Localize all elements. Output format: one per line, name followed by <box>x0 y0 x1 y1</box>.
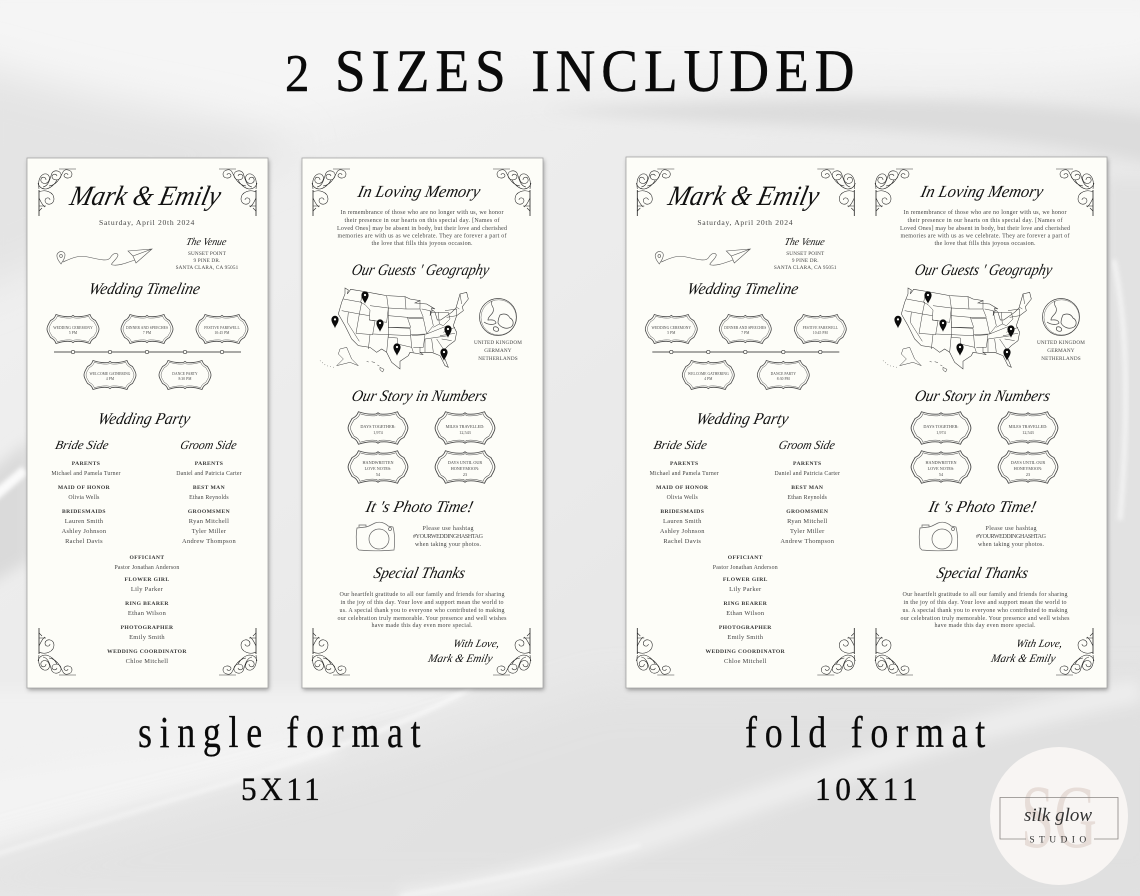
caption: single format: single format <box>138 708 421 757</box>
memorial paragraph: the love that fills this joyous occasion. <box>372 240 473 247</box>
corner ornament top right <box>1056 169 1094 216</box>
memorial paragraph: the love that fills this joyous occasion. <box>934 240 1036 247</box>
plaque: days together: 1,974 <box>373 430 384 436</box>
plaque: handwritten love notes <box>348 451 408 483</box>
sign-off: Mark & Emily <box>426 652 495 665</box>
plaque: days until honeymoon: DAYS UNTIL OUR <box>1011 460 1045 465</box>
other roles list: Ethan Wilson <box>726 610 765 617</box>
chart: US guest map with pins <box>883 288 1031 372</box>
plaque: dinner and speeches <box>121 314 173 344</box>
plaque: welcome gathering: WELCOME GATHERING <box>688 372 729 376</box>
bride side list: Bride Side <box>652 438 709 452</box>
thanks paragraph: Our heartfelt gratitude to all our family and friends for sharing <box>902 591 1068 598</box>
thanks paragraph: have made this day even more special. <box>934 623 1036 629</box>
plaque: miles travelled: MILES TRAVELLED: <box>1009 424 1047 429</box>
memorial paragraph: In remembrance of those who are no longer with us, we honor <box>904 209 1066 216</box>
icon: paper plane route <box>655 249 750 265</box>
plaque: days until honeymoon: DAYS UNTIL OUR <box>448 460 482 465</box>
plaque: wedding ceremony <box>47 314 99 344</box>
panel: single format front <box>27 158 269 690</box>
heading: special thanks: Special Thanks <box>935 564 1030 582</box>
thanks paragraph: our celebration truly memorable. Your presence and well wishes <box>338 616 507 622</box>
corner ornament top right <box>219 169 257 216</box>
plaque: festive farewell <box>196 314 248 344</box>
corner ornament bottom left <box>875 628 913 675</box>
other roles list: PHOTOGRAPHER <box>719 625 772 631</box>
plaque: handwritten love notes: HANDWRITTEN <box>926 460 956 465</box>
groom side list: Groom Side <box>179 438 239 452</box>
groom side list: Tyler Miller <box>192 528 227 535</box>
bride side list: BRIDESMAIDS <box>62 509 106 515</box>
plaque: dinner and speeches: 7 PM <box>741 331 750 335</box>
bride side list: Olivia Wells <box>667 495 698 501</box>
plaque: days together <box>348 412 408 444</box>
groom side list: GROOMSMEN <box>786 509 828 515</box>
venue block: SANTA CLARA, CA 95051 <box>774 265 837 271</box>
venue block: The Venue <box>783 237 826 248</box>
hashtag note: #YOURWEDDINGHASHTAG <box>976 534 1047 540</box>
other roles list: RING BEARER <box>125 601 169 607</box>
international guests: GERMANY <box>1047 348 1075 354</box>
corner ornament top right <box>493 169 531 216</box>
sign-off <box>989 638 1064 665</box>
plaque: welcome gathering: 4 PM <box>106 377 115 381</box>
bride side list: Ashley Johnson <box>660 528 705 535</box>
corner ornament bottom right <box>1056 628 1094 675</box>
groom side list: Daniel and Patricia Carter <box>775 471 840 477</box>
groom side list: Ethan Reynolds <box>787 495 828 501</box>
plaque: days together: 1,974 <box>936 430 947 436</box>
heading: our story in numbers: Our Story in Numbers <box>350 387 489 405</box>
bride side list: Rachel Davis <box>663 538 701 545</box>
timeline <box>47 314 248 390</box>
groom side list: Ryan Mitchell <box>189 518 229 525</box>
plaque: miles travelled: 12,543 <box>1022 430 1034 436</box>
groom side list: PARENTS <box>195 461 223 467</box>
heading: it's photo time: It 's Photo Time! <box>363 497 475 516</box>
caption: 5x11: 5X11 <box>241 770 320 807</box>
fold panel: inside left <box>636 169 855 675</box>
icon: camera <box>919 522 958 551</box>
plaque: handwritten love notes: LOVE NOTES: <box>928 466 954 471</box>
groom side list: BEST MAN <box>791 485 823 491</box>
bride side list: MAID OF HONOR <box>58 485 111 491</box>
plaque: miles travelled: 12,543 <box>459 430 471 436</box>
plaque: welcome gathering: WELCOME GATHERING <box>90 372 131 376</box>
memorial paragraph: memories are with us as we celebrate. They are forever a part of <box>900 232 1070 240</box>
hashtag note <box>413 526 484 548</box>
plaque: festive farewell: 10:45 PM <box>215 331 230 335</box>
corner ornament top right <box>817 169 855 216</box>
corner ornament top left <box>312 169 350 216</box>
international guests: GERMANY <box>484 348 512 354</box>
venue block <box>774 237 837 271</box>
plaque: dinner and speeches: DINNER AND SPEECHES <box>724 326 766 330</box>
groom side list: Tyler Miller <box>790 528 825 535</box>
groom side list: BEST MAN <box>193 485 225 491</box>
thanks paragraph: have made this day even more special. <box>372 623 473 629</box>
groom side list: Groom Side <box>777 438 837 452</box>
corner ornament bottom left <box>636 628 674 675</box>
plaque: handwritten love notes: LOVE NOTES: <box>365 466 391 471</box>
plaque: wedding ceremony <box>645 314 697 344</box>
bride side list: Michael and Pamela Turner <box>51 471 121 477</box>
hashtag note: when taking your photos. <box>415 542 482 548</box>
venue block: SANTA CLARA, CA 95051 <box>176 265 239 271</box>
heading: in loving memory: In Loving Memory <box>918 182 1046 201</box>
heading: wedding party: Wedding Party <box>694 409 791 428</box>
plaque: handwritten love notes <box>911 451 971 483</box>
caption: fold format: fold format <box>745 708 985 757</box>
plaque: days together <box>911 412 971 444</box>
corner ornament bottom right <box>219 628 257 675</box>
plaque: festive farewell: FESTIVE FAREWELL <box>803 326 838 330</box>
sign-off: With Love, <box>1015 638 1064 650</box>
international guests: NETHERLANDS <box>478 356 518 362</box>
logo: silk glow studio: STUDIO <box>1029 836 1091 846</box>
international guests: UNITED KINGDOM <box>1037 340 1085 346</box>
groom side list: Ryan Mitchell <box>787 518 827 525</box>
plaque: days until honeymoon: 23 <box>1026 472 1030 477</box>
other roles list: Pastor Jonathan Anderson <box>713 565 778 571</box>
international guests: UNITED KINGDOM <box>474 340 522 346</box>
other roles list: Ethan Wilson <box>128 610 167 617</box>
icon: paper plane route <box>57 249 152 265</box>
icon: globe <box>1042 298 1080 336</box>
memorial paragraph: Loved Ones] may be absent in body, but their love and cherished <box>900 226 1070 232</box>
groom side list: PARENTS <box>793 461 822 467</box>
date: Saturday, April 20th 2024 <box>99 218 195 227</box>
groom side list: Andrew Thompson <box>182 538 236 545</box>
plaque: wedding ceremony: WEDDING CEREMONY <box>53 326 93 330</box>
bride side list: MAID OF HONOR <box>656 485 709 491</box>
bride side list <box>51 438 121 545</box>
other roles list: Chloe Mitchell <box>724 658 767 665</box>
plaque: handwritten love notes: 54 <box>376 472 381 477</box>
other roles list: Emily Smith <box>129 634 165 641</box>
plaque: festive farewell: FESTIVE FAREWELL <box>204 326 240 330</box>
venue block: SUNSET POINT <box>786 251 825 257</box>
bride side list: Ashley Johnson <box>62 528 107 535</box>
venue block: 9 PINE DR. <box>792 258 819 264</box>
bride side list: Olivia Wells <box>68 495 100 501</box>
logo: silk glow studio: SG <box>1021 768 1097 867</box>
sign-off: With Love, <box>452 638 501 650</box>
heading: in loving memory: In Loving Memory <box>355 182 483 201</box>
caption: 10x11: 10X11 <box>815 770 918 807</box>
couple names: Mark & Emily <box>664 181 823 212</box>
venue block: 9 PINE DR. <box>194 258 220 264</box>
hashtag note: Please use hashtag <box>986 526 1036 532</box>
other roles list: Emily Smith <box>727 634 764 641</box>
bride side list: Rachel Davis <box>65 538 103 545</box>
other roles list: PHOTOGRAPHER <box>121 625 174 631</box>
thanks paragraph: in the joy of this day. Your love and support mean the world to <box>904 599 1066 606</box>
thanks paragraph <box>338 591 507 629</box>
groom side list: GROOMSMEN <box>188 509 230 515</box>
heading: it's photo time: It 's Photo Time! <box>926 497 1038 516</box>
other roles list: WEDDING COORDINATOR <box>107 649 187 655</box>
icon: camera <box>356 522 395 551</box>
heading: wedding timeline: Wedding Timeline <box>87 279 203 298</box>
plaque: days until honeymoon: 23 <box>463 472 467 477</box>
bride side list: BRIDESMAIDS <box>660 509 704 515</box>
sign-off: Mark & Emily <box>989 652 1058 665</box>
international guests <box>474 340 522 362</box>
plaque: dinner and speeches: 7 PM <box>143 331 152 335</box>
groom side list: Ethan Reynolds <box>189 495 229 501</box>
fold panel: inside right <box>875 169 1094 675</box>
groom side list <box>775 438 840 545</box>
plaque: wedding ceremony: WEDDING CEREMONY <box>652 326 691 330</box>
bride side list: Lauren Smith <box>663 518 702 525</box>
hashtag note: Please use hashtag <box>422 526 474 532</box>
plaque: dinner and speeches <box>719 314 771 344</box>
thanks paragraph: us. A special thank you to everyone who contributed to making <box>902 608 1068 614</box>
heading: our guests geography: Our Guests ' Geography <box>350 261 492 279</box>
corner ornament top left <box>875 169 913 216</box>
plaque: dance party: 8:30 PM <box>777 377 791 381</box>
bride side list <box>650 438 719 545</box>
thanks paragraph <box>900 591 1070 629</box>
plaque: wedding ceremony: 5 PM <box>667 331 676 335</box>
memorial paragraph <box>337 209 507 247</box>
groom side list: Daniel and Patricia Carter <box>176 471 242 477</box>
bride side list: PARENTS <box>72 461 100 467</box>
plaque: welcome gathering: 4 PM <box>704 377 713 381</box>
venue block <box>176 237 239 271</box>
plaque: dance party: DANCE PARTY <box>172 372 198 376</box>
corner ornament bottom right <box>817 628 855 675</box>
plaque: festive farewell <box>794 314 846 344</box>
plaque: days together: DAYS TOGETHER: <box>360 424 396 429</box>
heading: wedding timeline: Wedding Timeline <box>685 279 801 298</box>
plaque: festive farewell: 10:45 PM <box>813 331 828 335</box>
hashtag note <box>976 526 1047 548</box>
groom side list: Andrew Thompson <box>780 538 835 545</box>
plaque: days until honeymoon <box>435 451 495 483</box>
bride side list: Lauren Smith <box>65 518 104 525</box>
bride side list: Michael and Pamela Turner <box>650 471 719 477</box>
icon: globe <box>480 298 516 336</box>
plaque: miles travelled <box>435 412 495 444</box>
memorial paragraph: their presence in our hearts on this special day. [Names of <box>908 217 1062 224</box>
hashtag note: when taking your photos. <box>978 542 1044 548</box>
memorial paragraph: their presence in our hearts on this special day. [Names of <box>344 217 500 224</box>
other roles list <box>705 555 786 665</box>
other roles list: Chloe Mitchell <box>126 658 168 665</box>
plaque: miles travelled: MILES TRAVELLED: <box>446 424 484 429</box>
venue block: The Venue <box>185 237 228 248</box>
plaque: dance party: DANCE PARTY <box>771 372 796 376</box>
logo: silk glow studio: silk glow <box>1024 805 1092 826</box>
venue block: SUNSET POINT <box>188 251 227 257</box>
corner ornament bottom right <box>493 628 531 675</box>
corner ornament top left <box>38 169 76 216</box>
other roles list: WEDDING COORDINATOR <box>705 649 786 655</box>
thanks paragraph: us. A special thank you to everyone who contributed to making <box>340 608 504 614</box>
other roles list: OFFICIANT <box>728 555 763 561</box>
chart: US guest map with pins <box>320 288 468 372</box>
bride side list: PARENTS <box>670 461 699 467</box>
corner ornament bottom left <box>38 628 76 675</box>
other roles list: Pastor Jonathan Anderson <box>114 565 180 571</box>
memorial paragraph: Loved Ones] may be absent in body, but their love and cherished <box>337 226 507 232</box>
panel: single format back <box>302 158 544 690</box>
corner ornament bottom left <box>312 628 350 675</box>
other roles list: FLOWER GIRL <box>125 577 169 583</box>
memorial paragraph: In remembrance of those who are no longer with us, we honor <box>340 209 504 216</box>
groom side list <box>176 438 242 545</box>
plaque: days until honeymoon <box>998 451 1058 483</box>
timeline <box>645 314 846 390</box>
bride side list: Bride Side <box>54 438 111 452</box>
plaque: wedding ceremony: 5 PM <box>69 331 78 335</box>
plaque: dance party <box>757 360 809 390</box>
thanks paragraph: in the joy of this day. Your love and support mean the world to <box>340 599 504 606</box>
thanks paragraph: Our heartfelt gratitude to all our family and friends for sharing <box>340 591 504 598</box>
other roles list: OFFICIANT <box>130 555 164 561</box>
plaque: welcome gathering <box>682 360 734 390</box>
panel: fold format <box>626 157 1108 690</box>
other roles list: FLOWER GIRL <box>723 577 768 583</box>
corner ornament top left <box>636 169 674 216</box>
memorial paragraph <box>900 209 1070 247</box>
plaque: days together: DAYS TOGETHER: <box>923 424 959 429</box>
logo: silk glow studio <box>990 747 1128 885</box>
plaque: dance party: 8:30 PM <box>178 377 192 381</box>
hashtag note: #YOURWEDDINGHASHTAG <box>413 534 484 540</box>
plaque: dinner and speeches: DINNER AND SPEECHES <box>126 326 168 330</box>
plaque: dance party <box>159 360 211 390</box>
international guests <box>1037 340 1085 362</box>
date: Saturday, April 20th 2024 <box>697 218 793 227</box>
plaque: welcome gathering <box>84 360 136 390</box>
international guests: NETHERLANDS <box>1041 356 1081 362</box>
sign-off <box>426 638 501 665</box>
couple names: Mark & Emily <box>66 181 224 212</box>
plaque: handwritten love notes: 54 <box>939 472 944 477</box>
title: 2 sizes included: 2 SIZES INCLUDED <box>285 39 854 105</box>
heading: wedding party: Wedding Party <box>96 409 193 428</box>
other roles list: RING BEARER <box>723 601 768 607</box>
heading: special thanks: Special Thanks <box>372 564 467 582</box>
heading: our story in numbers: Our Story in Numbers <box>913 387 1052 405</box>
memorial paragraph: memories are with us as we celebrate. They are forever a part of <box>338 232 506 240</box>
other roles list <box>107 555 187 665</box>
thanks paragraph: our celebration truly memorable. Your presence and well wishes <box>900 616 1070 622</box>
other roles list: Lily Parker <box>131 586 164 593</box>
plaque: handwritten love notes: HANDWRITTEN <box>363 460 393 465</box>
heading: our guests geography: Our Guests ' Geography <box>913 261 1055 279</box>
other roles list: Lily Parker <box>729 586 762 593</box>
plaque: miles travelled <box>998 412 1058 444</box>
plaque: days until honeymoon: HONEYMOON: <box>451 466 479 471</box>
plaque: days until honeymoon: HONEYMOON: <box>1014 466 1042 471</box>
